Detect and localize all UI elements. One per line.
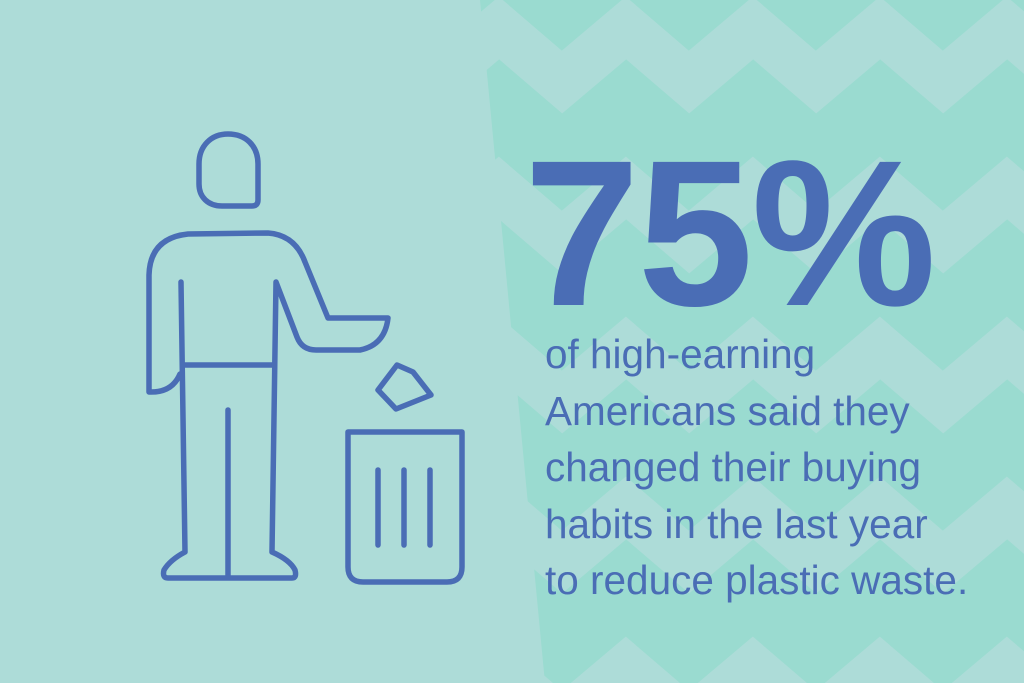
description text: of high-earning [545,331,815,377]
description text: changed their buying [545,444,921,490]
description text: to reduce plastic waste. [545,557,968,603]
description text: habits in the last year [545,500,928,546]
description text: Americans said they [545,388,910,434]
icon: person throwing trash in bin [146,131,465,585]
icon: body [149,233,388,578]
icon: head [199,134,258,206]
icon: debris [378,365,431,409]
description text [545,331,968,603]
icon: trash bin [348,432,462,582]
headline stat: 75%: 75% [524,118,934,350]
